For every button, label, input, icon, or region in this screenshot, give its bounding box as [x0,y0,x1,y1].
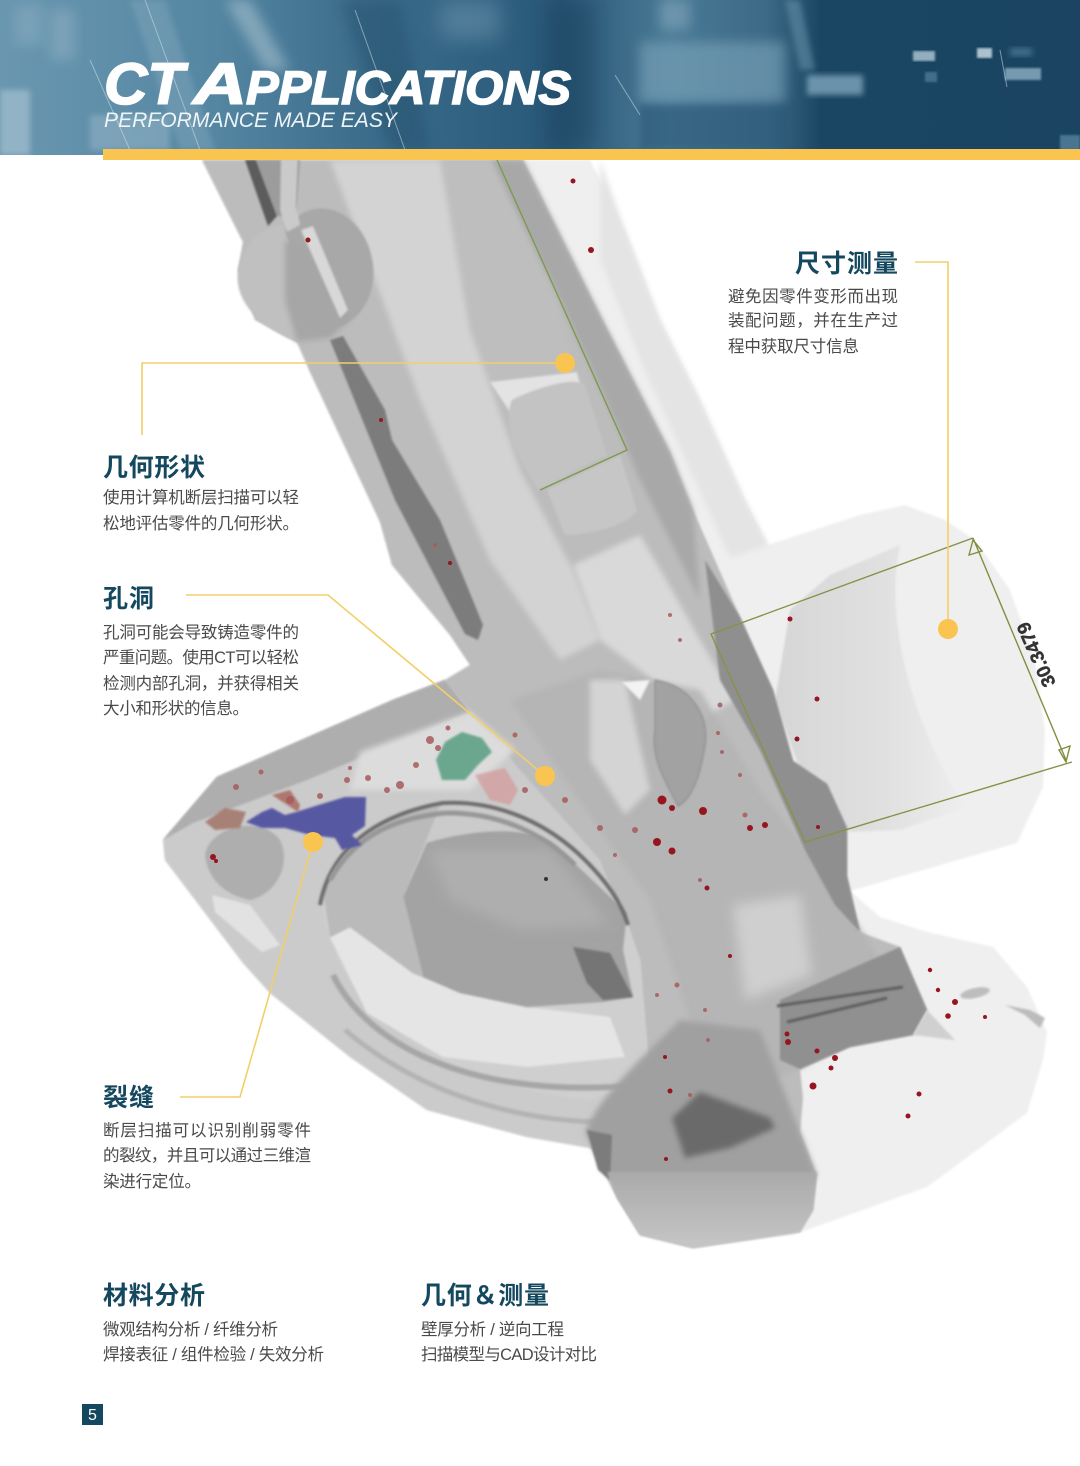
lug shaded side [285,240,350,342]
body: 检测内部孔洞，并获得相关 [103,674,299,693]
marker [303,832,323,852]
body: 松地评估零件的几何形状。 [103,514,299,533]
crossbar [490,372,580,412]
grey wedge beside slot [256,160,300,216]
grooved lower flange [322,900,650,1100]
heading: 尺寸测量 [795,250,898,278]
body: 的裂纹，并且可以通过三维渲 [103,1146,311,1165]
casting: CT scan of part [163,155,1047,1248]
groove band [345,1030,600,1122]
leader line [142,363,565,435]
pocket 2 [547,455,637,535]
flange top band [163,680,470,840]
dark slot upper [245,160,277,226]
body: 断层扫描可以识别削弱零件 [103,1121,311,1140]
measurement overlay [497,160,1072,842]
central pocket [440,160,577,385]
nozzle shell [780,947,927,1069]
brown defect cluster [205,808,246,830]
pocket rim [212,895,280,952]
ring second edge [330,813,575,880]
flange body [163,680,650,1150]
blue defect cluster [246,797,366,850]
marker [555,353,575,373]
marker [535,766,555,786]
body: 装配问题，并在生产过 [728,311,898,330]
body: 严重问题。使用CT可以轻松 [103,648,299,667]
lug tab [301,226,348,318]
lower base [607,1172,817,1248]
title [104,52,571,117]
body: 使用计算机断层扫描可以轻 [103,488,299,507]
pink defect cluster [475,768,518,805]
body: 焊接表征 / 组件检验 / 失效分析 [103,1345,324,1364]
lug [238,225,330,342]
ring upper edge [320,803,628,925]
page number: 5 [88,1407,97,1424]
bore dark blob [573,947,633,1000]
page number [82,1404,103,1425]
dark shell along cylinder [705,560,860,932]
nozzle grooves [777,987,903,1022]
heading: 裂缝 [103,1084,154,1112]
right dark band [490,160,700,600]
cylinder section plane [711,538,1072,842]
dimension line [969,538,1070,762]
main arm base [202,160,927,1248]
header banner [0,0,1080,155]
light lower bay [573,535,735,720]
bay light panel [733,895,812,1000]
grey smudge [959,985,991,1001]
light ridge [330,160,600,660]
flange lighter facet [350,712,515,790]
body: 避免因零件变形而出现 [728,287,898,306]
body: 大小和形状的信息。 [103,699,249,718]
light right strut shade [600,160,768,558]
light column [590,680,650,815]
heading: 几何＆测量 [421,1282,549,1310]
marker [938,619,958,639]
text block: 几何形状 [103,454,299,533]
dimension value: 30.3479 [1013,619,1061,690]
arm over flange [510,670,900,1090]
body: 扫描模型与CAD设计对比 [421,1345,597,1364]
body [103,623,299,718]
yellow header bar [103,149,1080,160]
body [728,287,898,356]
title: CT [104,52,189,117]
text block: 裂缝 [103,1084,311,1191]
text block: 尺寸测量 [728,250,898,356]
heading: 几何形状 [103,454,205,482]
body: 微观结构分析 / 纤维分析 [103,1320,278,1339]
body [103,1320,324,1364]
body [103,1121,311,1191]
banner background [0,0,1080,155]
heading: 孔洞 [103,585,154,613]
text block: 几何&测量 [421,1282,597,1364]
leader line [915,262,948,629]
subtitle: PERFORMANCE MADE EASY [104,109,399,132]
lower dark core [672,1092,775,1158]
body [103,488,299,533]
text block: 孔洞 [103,585,299,718]
body: 程中获取尺寸信息 [728,337,859,356]
body: 染进行定位。 [103,1172,201,1191]
bore top disc [428,850,610,930]
bore crescent [323,806,440,977]
body: 壁厚分析 / 逆向工程 [421,1320,564,1339]
title: A [190,52,247,117]
brown streak [272,790,300,812]
left flange pocket [205,826,284,900]
green defect cluster [436,732,492,780]
grey smudge right [1005,1005,1045,1028]
callout: pores [186,595,555,786]
lower dark corner [587,1130,612,1180]
leader line [186,595,545,776]
lug strap [280,155,300,232]
bore interior [403,831,633,1007]
dark slot lower [330,336,483,640]
groove band [333,975,640,1088]
body: 孔洞可能会导致铸造零件的 [103,623,299,642]
nozzle light flare [913,1010,955,1040]
scattered pores [210,178,987,1161]
pale pores [233,543,748,1097]
callout: dimensions [915,262,958,639]
lower translucent wall [585,1020,817,1176]
outer translucent silhouette [163,160,1047,1248]
callout: geometry [142,353,575,435]
callout: cracks [180,832,323,1097]
disc behind lug [267,201,383,335]
title: PPLICATIONS [246,61,571,114]
leader line [180,842,313,1097]
text block: 材料分析 [103,1282,324,1364]
arm hole white gap [622,680,650,700]
heading: 材料分析 [103,1282,205,1310]
upper section plane [497,160,627,490]
arm hole ring [654,680,706,806]
pocket 1 [509,382,607,490]
bore ledge [330,927,625,1067]
banner streaks [0,0,1080,155]
body [421,1320,597,1364]
cylinder inner bore [775,545,965,832]
